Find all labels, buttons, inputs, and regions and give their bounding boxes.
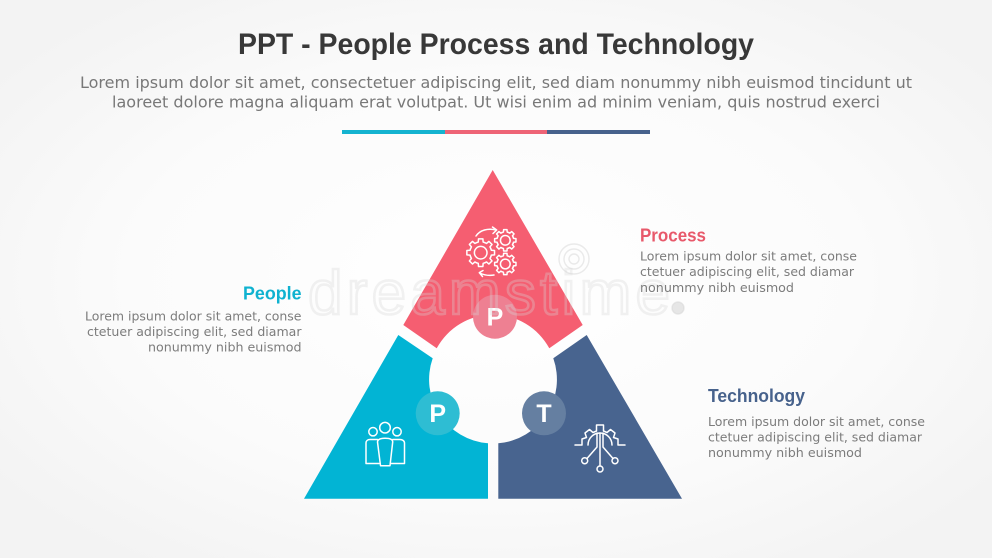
text block: process: nonummy nibh euismod <box>640 281 794 295</box>
text block: technology: ctetuer adipiscing elit, sed diamar <box>708 430 923 444</box>
subtitle text: Lorem ipsum dolor sit amet, consectetuer adipiscing elit, sed diam nonummy nibh euismod tincidunt ut <box>80 74 912 92</box>
badge: technology T <box>522 391 566 435</box>
segment: people <box>304 335 488 499</box>
heading: people: People <box>243 283 302 303</box>
text block: people: ctetuer adipiscing elit, sed diamar <box>87 325 303 339</box>
icon: technology gear circuit <box>575 425 625 472</box>
text block: technology: Lorem ipsum dolor sit amet, conse <box>708 415 925 429</box>
text block: people: Lorem ipsum dolor sit amet, conse <box>85 310 302 324</box>
title: PPT - People Process and Technology <box>238 28 755 61</box>
text block: process: ctetuer adipiscing elit, sed diamar <box>640 265 855 279</box>
heading: process: Process <box>640 226 706 246</box>
subtitle text: laoreet dolore magna aliquam erat volutpat. Ut wisi enim ad minim veniam, quis nostrud exerci <box>112 94 880 112</box>
triangle diagram <box>304 170 682 499</box>
heading: technology: Technology <box>708 386 805 406</box>
watermark: dreamstime <box>308 259 670 328</box>
text block: process <box>640 250 857 295</box>
text block: technology: nonummy nibh euismod <box>708 446 862 460</box>
text block: people: nonummy nibh euismod <box>148 340 302 354</box>
segment: technology <box>498 335 682 499</box>
badge: process P: P <box>487 304 503 332</box>
badge: people P <box>416 391 460 435</box>
badge: technology T: T <box>536 400 552 428</box>
badge: people P: P <box>429 400 446 428</box>
icon: gears <box>467 227 516 276</box>
subtitle text <box>80 74 912 112</box>
text block: process: Lorem ipsum dolor sit amet, conse <box>640 250 857 264</box>
callout: people <box>85 283 303 354</box>
text block: people <box>85 310 303 354</box>
badge: process P <box>473 295 517 339</box>
text block: technology <box>708 415 925 460</box>
segment: process <box>403 170 583 348</box>
callout: process <box>640 226 857 295</box>
tricolour divider <box>342 130 650 134</box>
callout: technology <box>708 386 925 460</box>
icon: people group <box>366 422 404 466</box>
